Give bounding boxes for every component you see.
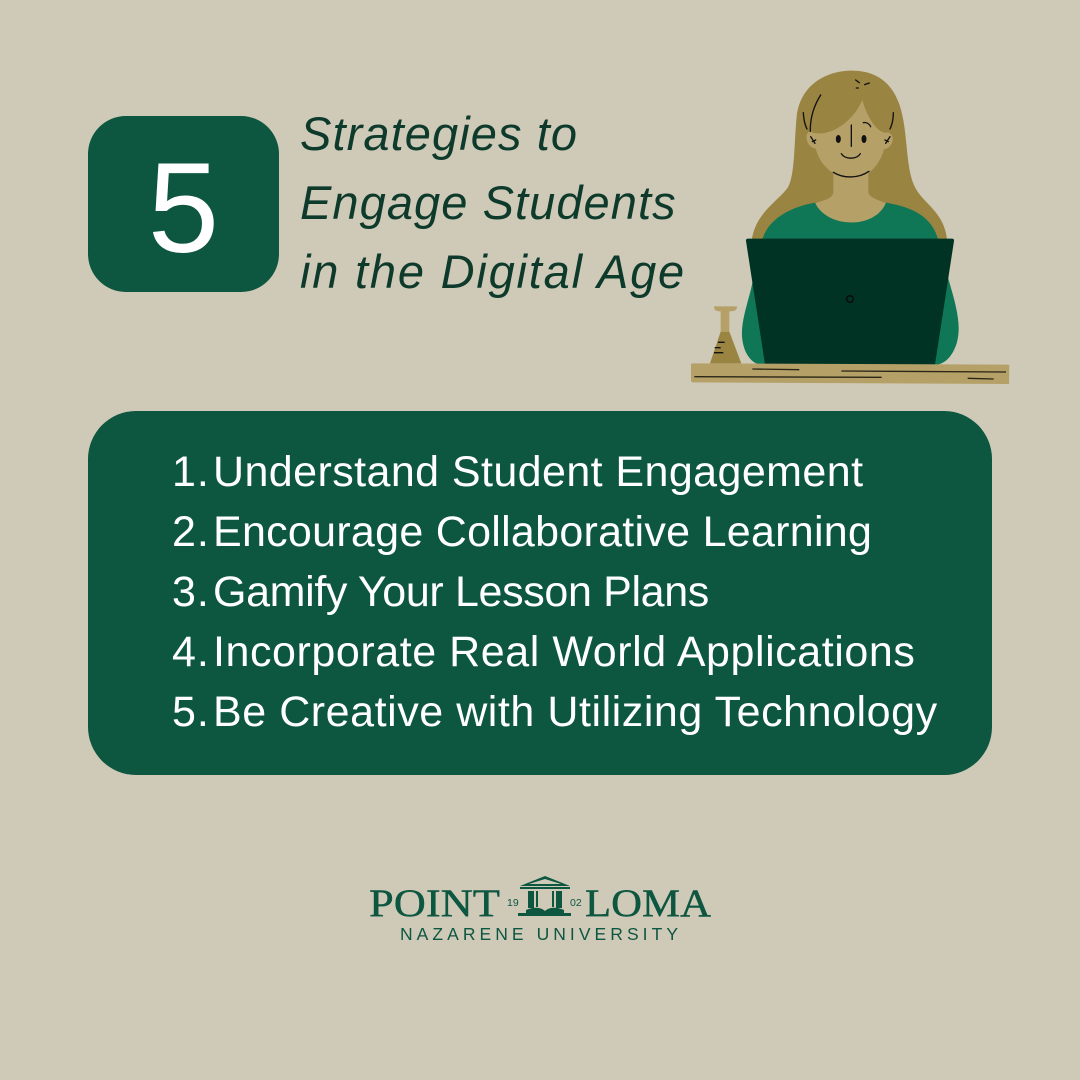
list item 2: Encourage Collaborative Learning	[213, 508, 872, 556]
sweater	[742, 203, 959, 365]
list item 4: 4.	[172, 628, 210, 676]
list item 1: 1.	[172, 448, 210, 496]
list item 5: 5.	[172, 688, 210, 736]
title: in the Digital Age	[300, 245, 686, 298]
number badge	[88, 116, 279, 292]
list item 3: Gamify Your Lesson Plans	[213, 568, 709, 616]
list item 4: Incorporate Real World Applications	[213, 628, 915, 676]
laptop	[746, 239, 954, 364]
logo: Point Loma Nazarene University: LOMA	[585, 882, 711, 925]
face lines	[803, 80, 893, 177]
desk	[691, 363, 1009, 384]
neck and face	[806, 100, 893, 227]
hair	[752, 71, 947, 242]
logo: Point Loma Nazarene University: POINT	[369, 882, 500, 925]
title	[300, 107, 686, 298]
list item 3: 3.	[172, 568, 210, 616]
title: Engage Students	[300, 176, 677, 229]
logo: Point Loma Nazarene University: 02	[570, 897, 582, 909]
title: Strategies to	[300, 107, 578, 160]
icon: building and book	[518, 876, 571, 916]
logo: Point Loma Nazarene University	[369, 876, 711, 944]
list item 2: 2.	[172, 508, 210, 556]
panel: strategies list	[88, 411, 992, 775]
list item 5: Be Creative with Utilizing Technology	[213, 688, 938, 736]
list item 1: Understand Student Engagement	[213, 448, 863, 496]
number badge: 5	[148, 137, 219, 280]
logo: Point Loma Nazarene University: 19	[507, 897, 519, 909]
illustration: student at laptop	[691, 70, 1010, 384]
logo: Point Loma Nazarene University: NAZARENE UNIVERSITY	[400, 924, 678, 944]
flask	[710, 332, 741, 363]
